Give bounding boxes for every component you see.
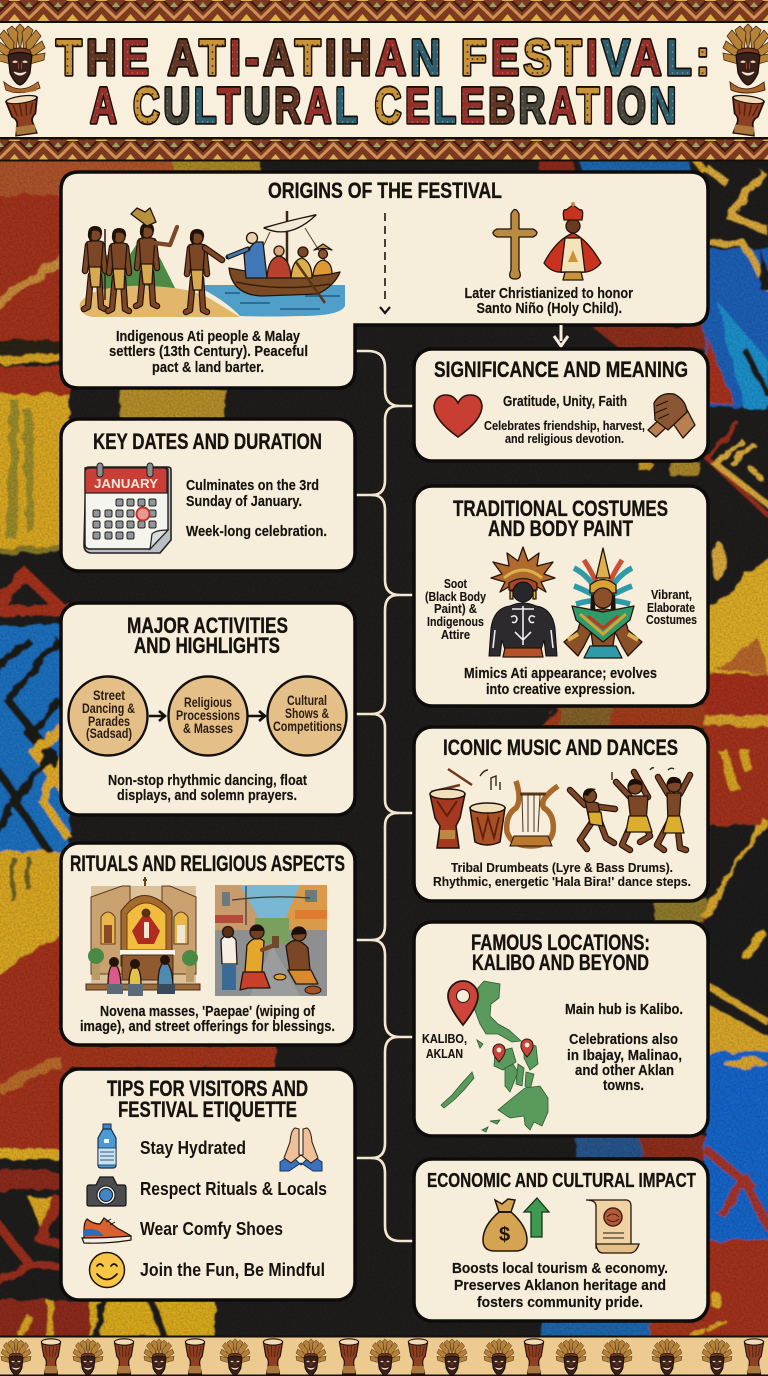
label: soot [425, 576, 487, 642]
text: mimics: Mimics Ati appearance; evolves [464, 666, 657, 682]
icon: shoe [82, 1218, 131, 1243]
arrow: origins to significance [554, 325, 568, 346]
label: Kalibo, Aklan: AKLAN [426, 1046, 463, 1061]
icon: smiley [90, 1252, 124, 1288]
top strip [175, 155, 260, 175]
text: date details: Culminates on the 3rd [186, 478, 319, 494]
text: locations: in Ibajay, Malinao, [567, 1048, 682, 1064]
step: religious processions: Processions [176, 708, 240, 723]
step: religious processions [168, 676, 248, 756]
label: Kalibo, Aklan [422, 1031, 467, 1061]
step: cultural shows [268, 676, 346, 756]
connector lines [355, 351, 414, 1241]
label: vibrant costumes: Elaborate [647, 600, 695, 615]
text: gratitude [484, 394, 645, 446]
text: gratitude: Celebrates friendship, harvest, [484, 418, 645, 433]
illustration: figure in vibrant costume [564, 548, 642, 658]
header banner [0, 0, 768, 162]
icon: left mask and drum [0, 24, 45, 137]
panel: major activities and highlights [61, 603, 355, 815]
heading: activities [127, 613, 288, 658]
heading: rituals: RITUALS AND RELIGIOUS ASPECTS [70, 851, 345, 876]
right strip bottom [704, 822, 768, 1000]
text: activities summary: displays, and solemn prayers. [117, 788, 297, 804]
list: visitor tips [140, 1138, 327, 1280]
list: visitor tips: Wear Comfy Shoes [140, 1219, 283, 1239]
text: date details: Sunday of January. [186, 494, 302, 510]
heading: costumes: TRADITIONAL COSTUMES [453, 496, 668, 521]
heading: tips: FESTIVAL ETIQUETTE [118, 1097, 297, 1122]
text: Ati people and settlers: settlers (13th Century). Peaceful [109, 344, 308, 360]
label: vibrant costumes: Costumes [646, 612, 697, 627]
step: cultural shows: Cultural [287, 693, 327, 708]
heading: economic: ECONOMIC AND CULTURAL IMPACT [427, 1170, 696, 1192]
text: gratitude: and religious devotion. [505, 431, 624, 446]
panel: rituals and religious aspects [61, 843, 355, 1045]
illustration: altar [86, 877, 200, 996]
arrow [248, 711, 265, 721]
icon: heart [434, 395, 482, 437]
heading: activities: AND HIGHLIGHTS [134, 633, 280, 658]
panel: origins of the festival [61, 172, 708, 388]
icon: heritage scroll [586, 1200, 639, 1253]
text: locations [565, 1002, 683, 1094]
heading: costumes: AND BODY PAINT [488, 516, 633, 541]
text: locations: and other Aklan [575, 1063, 674, 1079]
heading: key dates: KEY DATES AND DURATION [93, 429, 322, 454]
heading: origins: ORIGINS OF THE FESTIVAL [268, 178, 502, 203]
title [56, 29, 714, 134]
label: soot: Attire [441, 627, 470, 642]
text: impact: Preserves Aklanon heritage and [454, 1278, 666, 1294]
step: religious processions: Religious [184, 695, 232, 710]
text: Christianized: Santo Niño (Holy Child). [476, 301, 622, 317]
illustration: figure in black body paint [489, 547, 557, 657]
icon: clasped hands [648, 394, 695, 438]
label: soot: Paint) & [434, 601, 477, 616]
icon: camera [87, 1177, 126, 1206]
illustration: street offerings [215, 885, 327, 996]
heading: significance: SIGNIFICANCE AND MEANING [434, 357, 688, 382]
label: vibrant costumes [646, 587, 697, 627]
text: locations: Celebrations also [569, 1032, 678, 1048]
icon: praying hands [280, 1128, 322, 1171]
text: gratitude: Gratitude, Unity, Faith [503, 394, 627, 410]
text: date details: Week-long celebration. [186, 524, 327, 540]
label: soot: (Black Body [425, 589, 487, 604]
step: cultural shows: Competitions [273, 719, 342, 734]
text: music: Tribal Drumbeats (Lyre & Bass Drums). [451, 860, 673, 875]
step: street dancing: Street [93, 688, 125, 703]
icon: January calendar [84, 463, 171, 553]
icon: water bottle [98, 1124, 116, 1168]
icon: right mask and drum [723, 24, 768, 137]
illustration: drums and lyre [430, 769, 558, 848]
icon: wooden cross [493, 210, 537, 279]
text: Ati people and settlers: pact & land barter. [152, 360, 264, 376]
icon: small pins [493, 1039, 533, 1062]
heading: tips: TIPS FOR VISITORS AND [107, 1076, 308, 1101]
text: Ati people and settlers: Indigenous Ati people & Malay [116, 329, 300, 345]
gaps [120, 388, 225, 420]
step: street dancing: (Sadsad) [86, 726, 132, 741]
text: rituals: image), and street offerings for blessings. [80, 1019, 335, 1035]
text: rituals [80, 1004, 335, 1035]
text: Ati people and settlers [109, 329, 308, 376]
text: Christianized [464, 286, 633, 317]
left chevrons [0, 626, 70, 854]
left strip top [0, 155, 180, 200]
step: street dancing: Parades [88, 714, 130, 729]
text: mimics: into creative expression. [486, 682, 635, 698]
list: visitor tips: Join the Fun, Be Mindful [140, 1260, 325, 1280]
panel: famous locations [414, 922, 708, 1136]
heading: locations: KALIBO AND BEYOND [472, 950, 649, 975]
arrow [149, 711, 165, 721]
title: A CULTURAL CELEBRATION [90, 77, 680, 134]
text: rituals: Novena masses, 'Paepae' (wiping of [100, 1004, 315, 1020]
icon: money bag [483, 1199, 527, 1251]
icon: January calendar: JANUARY [94, 476, 158, 491]
panel: significance and meaning [414, 349, 708, 461]
right strip top [731, 171, 768, 231]
text: Christianized: Later Christianized to honor [464, 286, 633, 302]
step: religious processions: & Masses [183, 721, 233, 736]
dashed arrow [380, 213, 390, 313]
illustration: Ati people meeting Malay settlers [80, 208, 345, 317]
title: THE ATI-ATIHAN FESTIVAL: [56, 29, 714, 86]
step: cultural shows: Shows & [285, 706, 329, 721]
panel: iconic music and dances [414, 727, 708, 901]
text: impact: fosters community pride. [477, 1295, 643, 1311]
step: street dancing [68, 676, 148, 756]
list: visitor tips: Respect Rituals & Locals [140, 1179, 327, 1199]
label: vibrant costumes: Vibrant, [651, 587, 692, 602]
list: visitor tips: Stay Hydrated [140, 1138, 246, 1158]
left yellow and red [0, 851, 70, 978]
heading: activities: MAJOR ACTIVITIES [127, 613, 288, 638]
label: Kalibo, Aklan: KALIBO, [422, 1031, 467, 1046]
heading: locations: FAMOUS LOCATIONS: [471, 930, 650, 955]
text: locations: towns. [603, 1078, 644, 1094]
map: Philippines [441, 981, 548, 1132]
panel: traditional costumes and body paint [414, 486, 708, 706]
text: activities summary [108, 773, 307, 804]
footer band: masks and drums [0, 1336, 768, 1376]
text: locations: Main hub is Kalibo. [565, 1002, 683, 1018]
illustration: three dancers [570, 768, 690, 850]
icon: Kalibo map pin [448, 981, 478, 1025]
panel: tips for visitors and festival etiquette [61, 1069, 355, 1300]
text: music: Rhythmic, energetic 'Hala Bira!' dance steps. [433, 874, 691, 889]
heading: locations [471, 930, 650, 975]
panel: economic and cultural impact [414, 1159, 708, 1321]
panel: key dates and duration [61, 419, 355, 571]
text: mimics [464, 666, 657, 698]
text: impact: Boosts local tourism & economy. [452, 1261, 668, 1277]
text: activities summary: Non-stop rhythmic dancing, float [108, 773, 307, 789]
text: date details [186, 478, 327, 540]
heading: tips [107, 1076, 308, 1122]
label: soot: Soot [444, 576, 468, 591]
text: music [433, 860, 691, 889]
label: soot: Indigenous [427, 614, 484, 629]
icon: Santo Nino statue [544, 202, 601, 280]
heading: music: ICONIC MUSIC AND DANCES [443, 735, 678, 760]
icon: money bag: $ [499, 1224, 510, 1246]
heading: costumes [453, 496, 668, 541]
text: impact [452, 1261, 668, 1311]
step: street dancing: Dancing & [82, 701, 135, 716]
icon: growth arrow [524, 1198, 549, 1237]
